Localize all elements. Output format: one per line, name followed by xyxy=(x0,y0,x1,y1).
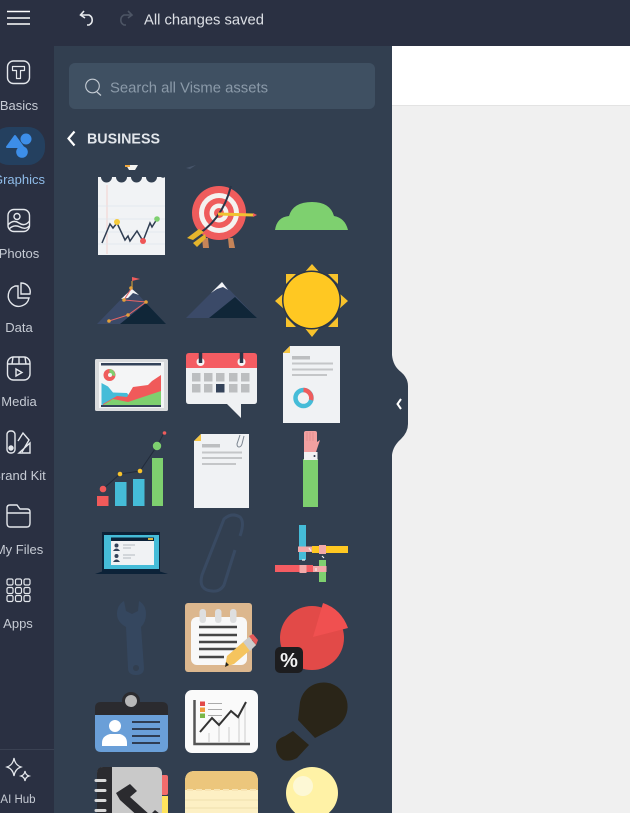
icon: report with donut xyxy=(283,346,340,423)
nav: Data: Data xyxy=(5,320,33,335)
nav: My Files xyxy=(0,505,44,557)
search box xyxy=(69,63,375,109)
icon: target with arrows xyxy=(187,186,257,248)
category heading: BUSINESS xyxy=(87,132,160,148)
icon: phone book xyxy=(96,767,168,813)
icon: mountain with route xyxy=(97,277,166,324)
icon: growth bar chart xyxy=(97,431,166,506)
icon: green cloud xyxy=(275,202,348,230)
icon: wrench xyxy=(117,601,146,675)
top bar xyxy=(0,0,630,46)
nav: Basics: Basics xyxy=(0,98,39,113)
nav: Apps xyxy=(3,579,33,631)
icon: yellow legal pad xyxy=(185,771,258,813)
nav: Graphics (active) xyxy=(0,127,46,187)
icon: sticky tape cross xyxy=(275,525,348,582)
nav: Apps: Apps xyxy=(3,616,33,631)
icon: paper with clip xyxy=(194,434,249,508)
search box: Search all Visme assets xyxy=(110,80,268,96)
icon: light bulb xyxy=(286,767,338,813)
icon: ID badge xyxy=(95,692,168,752)
icon: raised arm xyxy=(303,431,320,507)
icon: sun xyxy=(275,264,348,337)
clipped icon remnants xyxy=(125,165,196,170)
icon: calendar speech bubble xyxy=(186,352,257,418)
nav: AI Hub: AI Hub xyxy=(0,794,36,806)
icon: laptop xyxy=(95,532,168,574)
icon: line chart card xyxy=(185,690,258,753)
icon: undo xyxy=(80,11,92,25)
canvas white page strip xyxy=(392,46,630,106)
left navigation rail xyxy=(0,46,54,813)
assets panel xyxy=(54,46,408,813)
nav: Basics xyxy=(0,61,39,113)
nav: Data xyxy=(5,283,33,335)
icon: pie chart percent xyxy=(275,603,348,673)
icon: pie chart percent: % xyxy=(280,650,298,672)
nav: Photos xyxy=(0,210,40,261)
autosave status: All changes saved xyxy=(144,12,264,28)
collapse handle xyxy=(392,355,408,455)
icon: redo xyxy=(121,11,132,25)
icon: mountains xyxy=(186,282,257,318)
icon: area chart dashboard xyxy=(95,359,168,411)
nav: Brand Kit xyxy=(0,431,46,483)
icon: dark bulb xyxy=(276,682,348,761)
icon: hamburger menu xyxy=(7,12,30,24)
icon: paperclip xyxy=(201,515,242,591)
nav: AI Hub xyxy=(0,758,36,806)
nav: Media xyxy=(1,357,37,409)
icon: notebook and pencil xyxy=(185,603,258,672)
nav: Media: Media xyxy=(1,394,37,409)
icon: notepad chart xyxy=(98,177,165,255)
